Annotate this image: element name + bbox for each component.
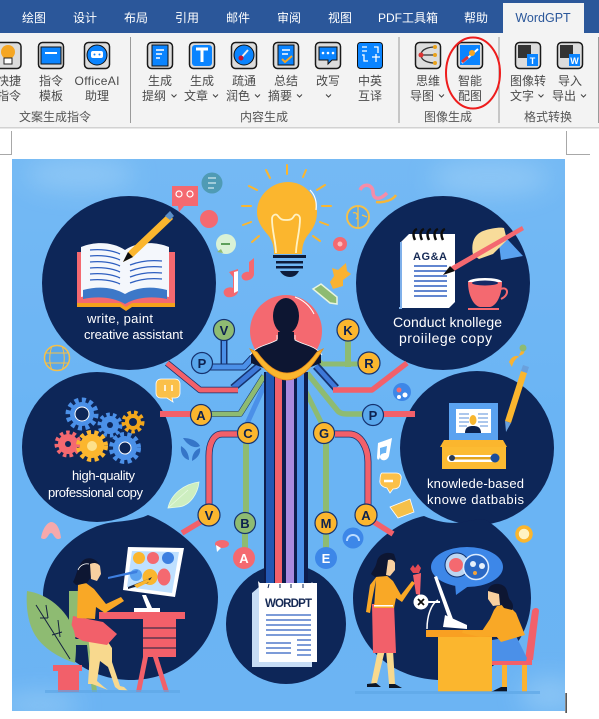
caption (427, 476, 524, 507)
icon: close button (414, 594, 440, 610)
ribbon toolbar: 导入 (558, 74, 582, 88)
panel: two women at desk (353, 516, 539, 692)
ribbon tab bar: PDF工具箱 (378, 10, 438, 25)
ribbon toolbar: T (530, 56, 536, 66)
node badges: C (243, 426, 253, 441)
panel: write, paint creative assistant (42, 196, 216, 370)
caption: knowlede-based (427, 476, 524, 491)
ribbon toolbar: 提纲 (142, 88, 166, 103)
icon: woman painting (70, 558, 128, 691)
icon: computer (427, 576, 467, 629)
icon: yellow box (440, 440, 507, 469)
page corner marks (0, 131, 590, 154)
ribbon tab bar: 视图 (328, 10, 352, 25)
node badges: E (322, 551, 331, 566)
node badges: G (319, 426, 329, 441)
icon: yellow desk (426, 630, 498, 692)
ribbon toolbar: 文章 (184, 88, 208, 103)
ribbon tab bar: 帮助 (464, 11, 488, 25)
icon: light bulb (242, 165, 331, 277)
icon: monitor with palette (108, 547, 184, 612)
caption: creative assistant (84, 327, 183, 342)
icon: chair (69, 591, 104, 692)
ribbon toolbar: 生成 (148, 74, 172, 88)
avatar: central figure (250, 295, 323, 380)
panel: conduct knowledge (356, 196, 530, 370)
ribbon toolbar: 内容生成 (240, 109, 288, 124)
ribbon toolbar: OfficeAI (74, 74, 120, 88)
infographic image (0, 159, 580, 717)
ribbon tab bar: 审阅 (277, 10, 301, 25)
ribbon toolbar: 润色 (226, 89, 250, 103)
node badges: V (205, 508, 214, 523)
icon: WORDPT document: WORDPT (265, 598, 312, 610)
ribbon toolbar: 生成 (190, 74, 214, 88)
ribbon toolbar: 文字 (510, 88, 534, 103)
node badges: B (240, 516, 250, 531)
icon: standing woman (366, 553, 421, 688)
caption (393, 314, 502, 346)
central bundle of stripes (264, 372, 308, 587)
node badges: K (343, 323, 353, 338)
caption: proiilege copy (399, 330, 492, 346)
caption (48, 468, 144, 500)
ribbon tab bar: 邮件 (226, 11, 250, 25)
icon: gears (56, 400, 142, 462)
icon: desk (99, 612, 185, 692)
node badges: M (321, 516, 331, 531)
ribbon toolbar: 格式转换 (524, 109, 572, 124)
ribbon toolbar: 疏通 (232, 73, 256, 88)
flow lines: left (160, 340, 265, 555)
node badges: A (361, 508, 371, 523)
icon: notepad: AG&A (413, 251, 447, 263)
node badges: P (369, 408, 378, 423)
node badges: R (364, 356, 374, 371)
icon: potted plant (27, 591, 82, 692)
red highlight ellipse (446, 38, 500, 108)
ribbon toolbar: 图像生成 (424, 110, 472, 124)
node badges: A (196, 408, 206, 423)
ribbon toolbar: 中英 (358, 73, 382, 88)
panel: WORDPT document (226, 564, 346, 684)
floor shadow (45, 690, 540, 694)
panel: knowledge-based database (400, 365, 554, 525)
ribbon toolbar: 模板 (39, 89, 63, 103)
caption: high-quality (72, 468, 136, 483)
ribbon tab bar: 设计 (73, 11, 97, 25)
ribbon toolbar: 图像转 (510, 73, 546, 88)
text cursor mark (566, 693, 567, 713)
ribbon toolbar: 指令 (39, 73, 63, 88)
ribbon toolbar: W (570, 56, 579, 66)
ribbon toolbar: 助理 (85, 89, 109, 103)
icon: speech bubble with globes (431, 547, 503, 595)
ribbon toolbar (0, 33, 599, 128)
icon: WORDPT document (252, 581, 317, 667)
ribbon toolbar: 文案生成指令 (19, 109, 91, 124)
caption: professional copy (48, 485, 144, 500)
icon: notepad (399, 229, 455, 308)
ribbon toolbar: 思维 (416, 74, 440, 88)
ribbon toolbar: 配图 (458, 89, 482, 103)
node badges (190, 319, 384, 569)
decorative icons: left (41, 172, 254, 552)
ribbon toolbar: 总结 (274, 74, 298, 88)
node badges: P (198, 356, 207, 371)
icon: pencil (505, 365, 529, 432)
caption: knowe datbabis (427, 492, 524, 507)
ribbon toolbar: 导出 (552, 89, 576, 103)
ribbon toolbar: 导图 (410, 89, 434, 103)
node badges: V (220, 323, 229, 338)
ribbon toolbar: 改写 (316, 74, 340, 88)
decorative icons: right (313, 185, 531, 548)
panel: designer at monitor (27, 515, 218, 692)
icon: hand and pen (443, 226, 524, 275)
ribbon tab bar: WordGPT (515, 11, 571, 25)
ribbon toolbar: 摘要 (268, 88, 292, 103)
icon: coffee cup (468, 278, 507, 310)
ribbon tab bar: 引用 (175, 11, 199, 25)
icon: open book (77, 243, 175, 311)
node badges: A (239, 551, 249, 566)
caption (84, 311, 183, 342)
ribbon toolbar: 智能 (458, 73, 482, 88)
ribbon tab bar (0, 0, 599, 33)
icon: pencil (123, 211, 174, 262)
caption: write, paint (86, 311, 153, 326)
icon: profile card (449, 403, 498, 440)
panel: high-quality professional copy (22, 372, 172, 522)
caption: Conduct knollege (393, 314, 502, 330)
ribbon tab bar: 绘图 (22, 10, 46, 25)
icon: seated woman (462, 584, 539, 692)
ribbon toolbar: 互译 (358, 89, 382, 103)
ribbon tab bar: 布局 (124, 11, 148, 25)
flow lines: right (247, 340, 415, 552)
